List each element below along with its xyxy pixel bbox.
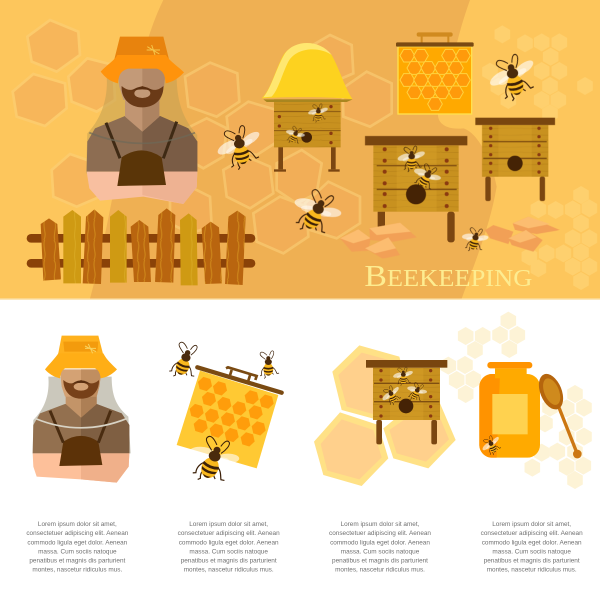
text block 4: consectetuer adipiscing elit. Aenean bbox=[481, 530, 583, 537]
text block 3: montes, nascetur ridiculus mus. bbox=[335, 566, 425, 573]
large wooden hive bbox=[365, 136, 467, 242]
bee: on large hive lower bbox=[407, 159, 445, 195]
text block 1: consectetuer adipiscing elit. Aenean bbox=[26, 530, 129, 537]
bee: top right bbox=[483, 50, 543, 106]
bee: on jar bbox=[478, 433, 505, 458]
text block 1: penatibus et magnis dis parturient bbox=[29, 557, 126, 564]
bee: lower hive left bbox=[378, 383, 405, 408]
bee: lower on frame bbox=[179, 429, 245, 492]
text block 4: commodo ligula eget dolor. Aenean bbox=[482, 539, 582, 546]
bee: top centre bbox=[283, 181, 348, 244]
text block 4 bbox=[481, 521, 583, 573]
text block 2: massa. Cum sociis natoque bbox=[189, 548, 268, 555]
bee: near wax blocks bbox=[458, 224, 491, 255]
wax blocks right bbox=[485, 217, 560, 252]
wooden fence bbox=[27, 208, 255, 285]
text block 3 bbox=[329, 521, 431, 573]
bee: on thatched hive left bbox=[282, 123, 307, 148]
beekeeper, lower bbox=[33, 336, 131, 483]
text block 3: Lorem ipsum dolor sit amet, bbox=[341, 521, 420, 528]
text block 2: Lorem ipsum dolor sit amet, bbox=[189, 521, 268, 528]
text block 4: Lorem ipsum dolor sit amet, bbox=[492, 521, 571, 528]
text block 3: commodo ligula eget dolor. Aenean bbox=[330, 539, 430, 546]
honeycomb cluster top right bbox=[482, 25, 597, 290]
text block 4: penatibus et magnis dis parturient bbox=[484, 557, 580, 564]
honeycomb frame, top bbox=[396, 32, 474, 114]
bee: on large hive upper bbox=[397, 146, 426, 172]
top banner background bbox=[0, 0, 600, 300]
text block 4: massa. Cum sociis natoque bbox=[492, 548, 571, 555]
wax blocks left bbox=[340, 223, 417, 259]
text block 1: Lorem ipsum dolor sit amet, bbox=[38, 521, 117, 528]
bee: lower right of frame bbox=[252, 351, 283, 378]
text block 1: massa. Cum sociis natoque bbox=[38, 548, 117, 555]
large hexagons behind lower hive bbox=[314, 345, 456, 486]
text block 1: commodo ligula eget dolor. Aenean bbox=[27, 539, 128, 546]
bee: lower left of frame bbox=[159, 336, 210, 385]
text block 4: montes, nascetur ridiculus mus. bbox=[487, 566, 577, 573]
text block 3: massa. Cum sociis natoque bbox=[341, 548, 420, 555]
honeycomb outlines behind the man bbox=[13, 20, 392, 253]
text block 1: montes, nascetur ridiculus mus. bbox=[32, 566, 122, 573]
text block 2 bbox=[178, 521, 280, 573]
thatched hive bbox=[262, 43, 353, 172]
text block 2: montes, nascetur ridiculus mus. bbox=[184, 566, 274, 573]
title: BEEKEEPING bbox=[364, 259, 532, 293]
text block 2: consectetuer adipiscing elit. Aenean bbox=[178, 530, 280, 537]
beekeeper with veil, top bbox=[86, 37, 197, 204]
bee: lower hive top bbox=[393, 367, 414, 386]
small wooden hive bbox=[475, 118, 555, 201]
lower hive bbox=[366, 360, 447, 444]
honey spoon bbox=[534, 370, 582, 458]
bee: on thatched hive bbox=[308, 104, 329, 122]
honeycomb frame, rotated bbox=[177, 367, 282, 468]
text block 1 bbox=[26, 521, 129, 573]
text block 2: commodo ligula eget dolor. Aenean bbox=[179, 539, 279, 546]
bee: lower hive right bbox=[403, 379, 430, 405]
text block 2: penatibus et magnis dis parturient bbox=[181, 557, 277, 564]
panel: white lower section hexagons bbox=[441, 312, 592, 489]
bee: top flying left bbox=[212, 122, 267, 173]
text block 3: consectetuer adipiscing elit. Aenean bbox=[329, 530, 431, 537]
honey jar bbox=[479, 362, 540, 458]
text block 3: penatibus et magnis dis parturient bbox=[332, 557, 428, 564]
